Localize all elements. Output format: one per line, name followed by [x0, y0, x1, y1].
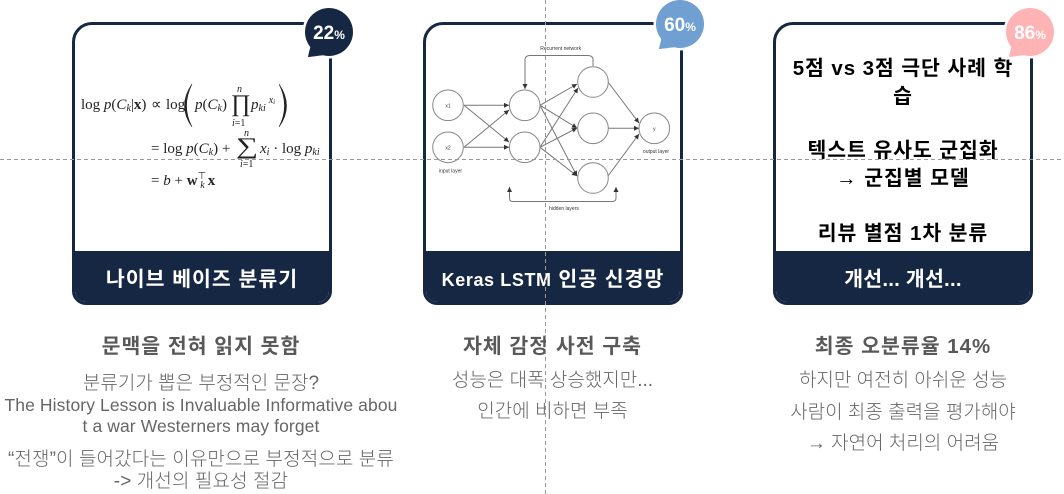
formula: naive bayes equations: i=1	[232, 118, 245, 129]
panel: naive bayes card	[72, 22, 332, 305]
formula: naive bayes equations: ) +	[213, 141, 230, 157]
formula: naive bayes equations: ki	[258, 103, 266, 114]
formula: naive bayes equations: ∝	[151, 97, 162, 113]
body text: → 자연어 처리의 어려움	[807, 433, 999, 454]
body text: 성능은 대폭 상승했지만...	[452, 370, 653, 391]
formula: naive bayes equations: i	[273, 98, 275, 106]
formula: naive bayes equations: = b + w	[151, 173, 198, 189]
conclusion text: “전쟁”이 들어갔다는 이유만으로 부정적으로 분류	[8, 449, 394, 470]
text block: final result notes	[790, 335, 1016, 454]
formula: naive bayes equations: ⊤	[198, 171, 206, 182]
panel: keras lstm card	[423, 22, 683, 305]
formula: naive bayes equations: p	[304, 141, 313, 157]
card title: 개선... 개선...	[844, 268, 962, 291]
badge: 86 percent: 86%	[1014, 23, 1046, 44]
card title: 나이브 베이즈 분류기	[106, 268, 298, 291]
formula: naive bayes equations: |	[131, 97, 134, 113]
diagram: recurrent neural network: output layer	[643, 149, 669, 155]
formula: naive bayes equations: k	[200, 180, 205, 191]
heading: 문맥을 전혀 읽지 못함	[102, 335, 300, 358]
formula: naive bayes equations: i	[267, 147, 270, 158]
heading: 최종 오분류율 14%	[815, 335, 991, 358]
body text: 분류기가 뽑은 부정적인 문장?	[83, 373, 319, 394]
diagram: recurrent neural network: x1	[445, 104, 451, 110]
body text: t a war Westerners may forget	[83, 416, 319, 436]
formula: naive bayes equations: ∑	[236, 133, 258, 159]
body text	[452, 370, 653, 422]
formula: naive bayes equations: x	[208, 173, 216, 189]
card title	[72, 251, 332, 305]
formula: naive bayes equations: x)	[134, 97, 146, 113]
formula: naive bayes equations: x	[268, 95, 274, 106]
body text	[4, 373, 398, 436]
conclusion text: -> 개선의 필요성 절감	[114, 470, 288, 492]
text block: lstm notes	[452, 335, 653, 422]
card title	[423, 251, 683, 305]
body text: 인간에 비하면 부족	[477, 401, 628, 422]
text block: naive bayes notes	[4, 335, 398, 492]
formula: naive bayes equations: ∏	[231, 91, 251, 117]
formula: naive bayes equations: n	[237, 84, 242, 95]
formula: naive bayes equations: k	[218, 103, 223, 114]
diagram: recurrent neural network: Recurrent network	[540, 46, 582, 52]
list of improvement steps: 습	[893, 85, 913, 108]
diagram: recurrent neural network: x2	[445, 146, 451, 152]
diagram: recurrent neural network: y	[653, 126, 656, 132]
badge: 22 percent	[303, 8, 353, 58]
card title	[773, 251, 1033, 305]
list of improvement steps: 5점 vs 3점 극단 사례 학	[793, 57, 1013, 80]
formula: naive bayes equations: x	[259, 141, 267, 157]
formula: naive bayes equations: log p(C	[81, 97, 126, 113]
formula: naive bayes equations: p(C	[195, 97, 218, 113]
formula: naive bayes equations	[81, 84, 320, 191]
badge: 22 percent: 22%	[313, 23, 345, 44]
formula: naive bayes equations: ki	[312, 147, 320, 158]
list of improvement steps: 리뷰 별점 1차 분류	[818, 222, 988, 245]
heading: 자체 감정 사전 구축	[463, 335, 642, 358]
badge: 86 percent	[1004, 8, 1054, 60]
body text: The History Lesson is Invaluable Informative abou	[4, 394, 398, 414]
formula: naive bayes equations: )	[222, 97, 227, 113]
diagram: recurrent neural network	[432, 46, 670, 212]
formula: naive bayes equations: p	[250, 97, 259, 113]
formula: naive bayes equations: = log p(C	[151, 141, 209, 157]
formula: naive bayes equations: k	[126, 103, 131, 114]
conclusion text	[8, 449, 394, 492]
card title: Keras LSTM 인공 신경망	[442, 268, 664, 291]
badge: 60 percent: 60%	[664, 15, 696, 36]
formula: naive bayes equations: k	[209, 147, 214, 158]
formula: naive bayes equations: i=1	[240, 159, 253, 170]
list of improvement steps: 텍스트 유사도 군집화	[807, 139, 999, 162]
formula: naive bayes equations: · log	[269, 141, 305, 157]
diagram: recurrent neural network: hidden layers	[549, 206, 579, 212]
list of improvement steps: → 군집별 모델	[836, 167, 970, 190]
body text	[790, 370, 1016, 454]
body text: 하지만 여전히 아쉬운 성능	[799, 370, 1007, 391]
badge: 60 percent	[654, 0, 704, 50]
formula: naive bayes equations: n	[244, 128, 249, 139]
body text: 사람이 최종 출력을 평가해야	[790, 402, 1016, 422]
panel: improvement card	[773, 22, 1033, 305]
list of improvement steps	[793, 57, 1013, 245]
formula: naive bayes equations: log	[166, 97, 186, 113]
diagram: recurrent neural network: input layer	[439, 168, 462, 174]
